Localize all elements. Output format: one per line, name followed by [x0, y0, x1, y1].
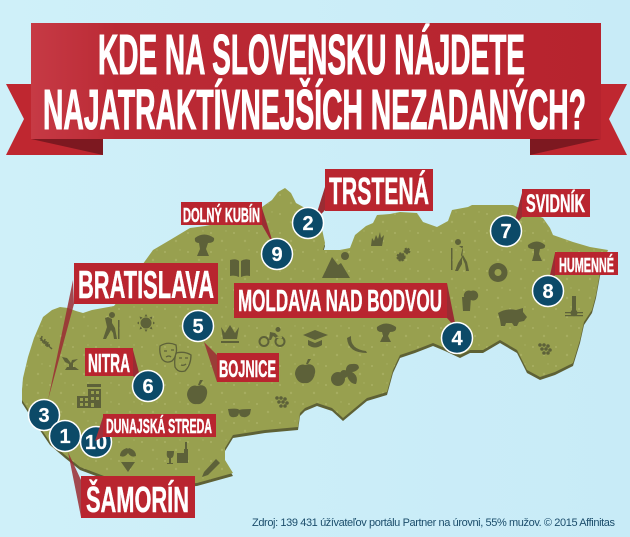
icon: hiker	[451, 239, 469, 271]
marker 10: 10	[85, 432, 107, 454]
marker 7	[490, 216, 522, 246]
icon: sprout	[62, 357, 79, 370]
label: Šamorín: ŠAMORÍN	[86, 478, 189, 520]
marker 7: 7	[500, 221, 512, 243]
icon: book	[230, 259, 250, 277]
marker 10	[80, 426, 112, 458]
marker 6: 6	[142, 376, 154, 398]
icon: apple	[295, 359, 315, 383]
label: Bratislava: BRATISLAVA	[78, 264, 214, 307]
marker 3: 3	[38, 405, 50, 427]
banner body	[31, 23, 601, 139]
source note: Zdroj: 139 431 úžívateľov portálu Partner na úrovni, 55% mužov. © 2015 Affinitas	[252, 517, 616, 529]
label: Trstená	[314, 169, 433, 222]
label: Dunajská Streda: DUNAJSKÁ STREDA	[106, 415, 212, 438]
label: Dolný Kubín	[181, 202, 274, 246]
marker 1	[50, 420, 80, 452]
icon: soccer ball	[489, 263, 508, 282]
banner right fold	[530, 139, 601, 155]
map icons	[40, 232, 583, 477]
banner right tail	[530, 84, 627, 155]
label: Bojnice: BOJNICE	[219, 356, 276, 383]
label: Trstená: TRSTENÁ	[329, 169, 429, 213]
icon: apple	[187, 380, 207, 404]
icon: hiker	[103, 312, 120, 339]
icon: tree	[377, 324, 396, 342]
label: Svidník: SVIDNÍK	[526, 189, 585, 218]
icon: bikini	[120, 448, 136, 472]
icon: drink	[462, 290, 478, 311]
marker 5: 5	[192, 316, 204, 338]
icon: graduation cap	[303, 330, 328, 348]
icon: mountain with sun	[322, 252, 350, 278]
label: Nitra: NITRA	[88, 348, 130, 378]
marker 9: 9	[271, 244, 283, 266]
label: Moldava nad Bodvou: MOLDAVA NAD BODVOU	[238, 283, 442, 318]
label: Šamorín	[68, 452, 195, 520]
icon: tree	[195, 234, 214, 256]
icon: banana	[347, 336, 367, 353]
label: Moldava nad Bodvou	[234, 283, 456, 328]
icon: theatre masks	[160, 343, 191, 372]
label: Bratislava	[48, 263, 218, 400]
banner left fold	[31, 139, 103, 155]
label: Nitra	[85, 348, 142, 384]
icon: sunglasses	[228, 409, 251, 417]
icon: grapes	[275, 396, 289, 408]
banner left tail	[6, 84, 103, 155]
icon: crown	[221, 325, 239, 343]
label: Svidník	[513, 189, 590, 228]
icon: tree	[528, 242, 545, 261]
marker 8: 8	[542, 281, 554, 303]
icon: cyclist	[258, 327, 286, 347]
marker 1: 1	[59, 426, 71, 448]
icon: pig	[498, 308, 527, 326]
icon: wheat	[40, 336, 52, 349]
marker 9	[262, 238, 292, 270]
marker 4	[442, 322, 472, 354]
marker 4: 4	[451, 328, 463, 350]
marker 5	[182, 310, 214, 342]
marker 3	[28, 400, 60, 430]
label: Humenné	[548, 252, 618, 284]
icon: wine	[167, 442, 188, 464]
marker 2	[292, 208, 324, 238]
icon: thermometer	[565, 296, 583, 316]
icon: sun	[137, 314, 155, 332]
marker 6	[132, 370, 164, 402]
icon: pencil	[202, 459, 220, 477]
icon: gears	[397, 248, 410, 261]
markers	[28, 208, 564, 452]
marker 2: 2	[302, 213, 314, 235]
icon: hotel	[77, 384, 101, 408]
title banner	[6, 23, 627, 155]
icon: pears	[331, 364, 359, 386]
map of Slovakia	[22, 188, 608, 488]
marker 8	[532, 276, 564, 306]
label: Dolný Kubín: DOLNÝ KUBÍN	[183, 203, 260, 227]
label: Dunajská Streda	[95, 414, 216, 441]
label: Bojnice	[204, 342, 279, 383]
icon: grass	[371, 232, 384, 246]
icon: grapes	[538, 343, 552, 355]
